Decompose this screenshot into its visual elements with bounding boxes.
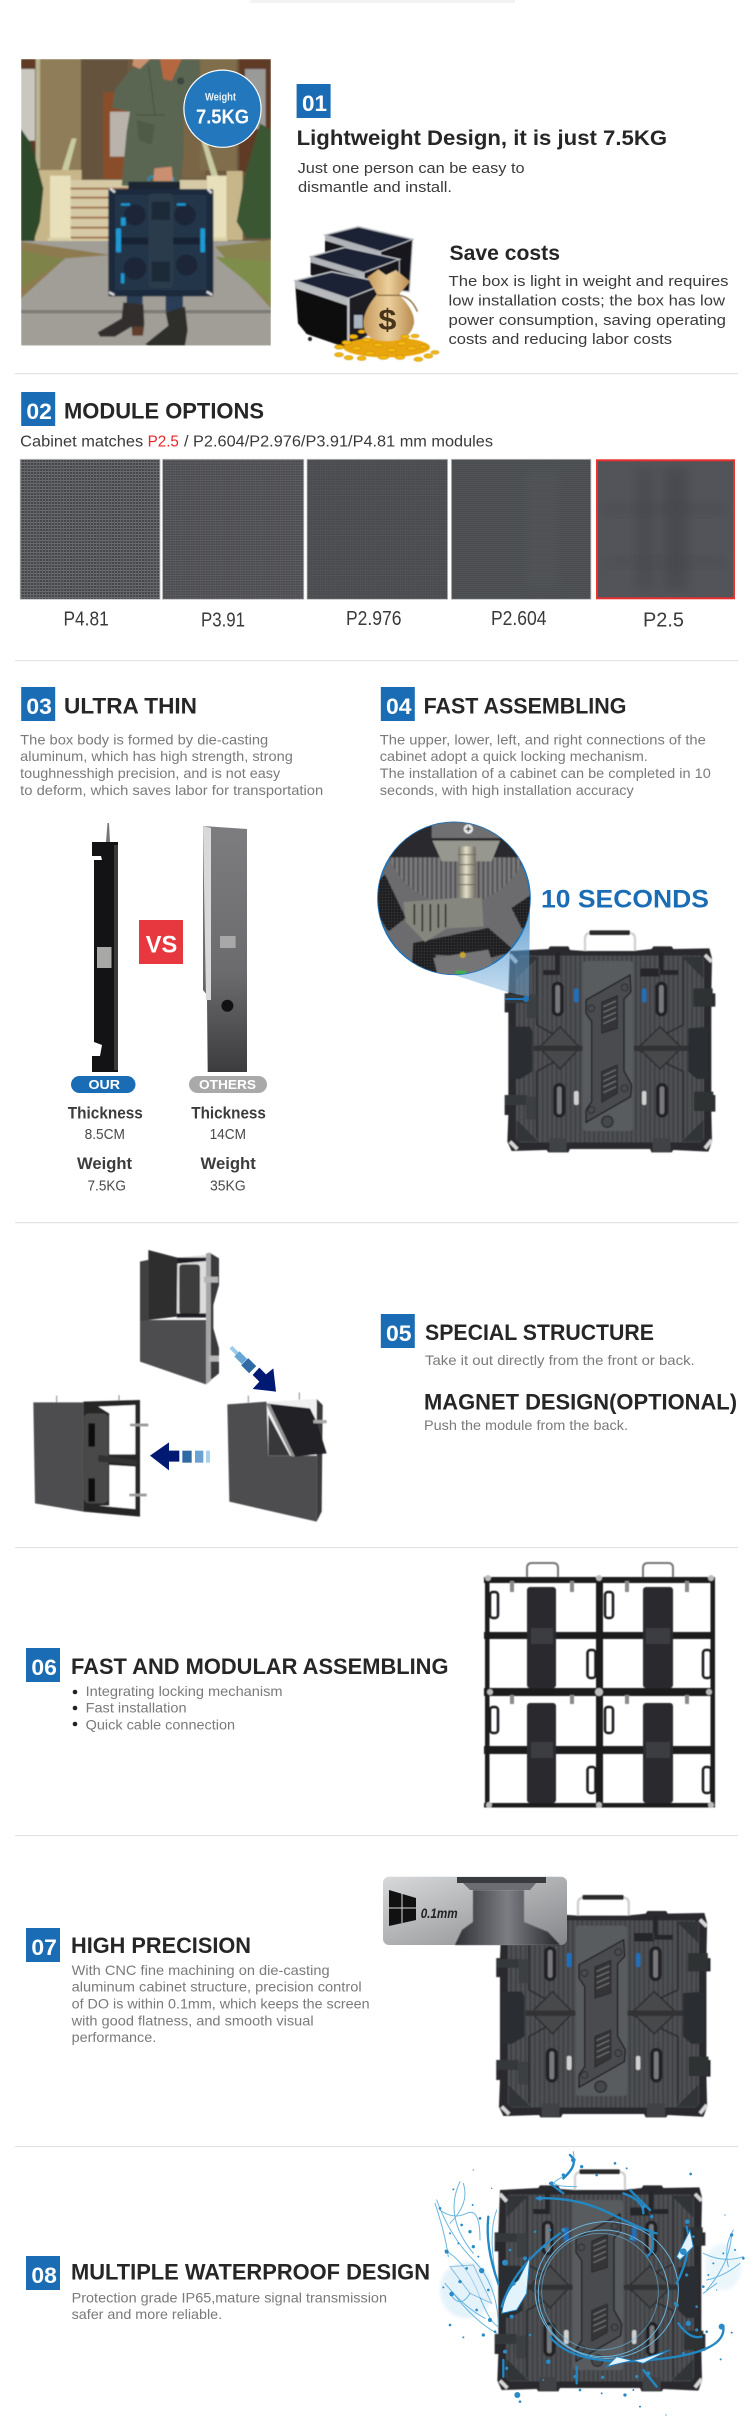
icon: flight cases and money bag: $ <box>378 304 396 337</box>
text: ultra thin description: aluminum, which has high strength, strong <box>20 748 293 764</box>
text: ultra thin description: toughnesshigh precision, and is not easy <box>20 765 280 781</box>
label: OTHERS: OTHERS <box>199 1077 256 1092</box>
text: waterproof description <box>72 2289 387 2322</box>
module swatch P4.81 <box>20 459 160 631</box>
module swatch P2.5 selected: P2.5 <box>643 610 684 632</box>
number badge 04 <box>381 687 415 721</box>
label: OTHERS <box>189 1076 267 1093</box>
text: fast assembling description: The installation of a cabinet can be completed in 10 <box>380 765 711 781</box>
section 03: ultra thin <box>20 687 323 1195</box>
text: one person install <box>298 160 525 196</box>
callout: blue funnel to lock <box>448 900 530 1002</box>
heading: save costs: Save costs <box>450 242 560 265</box>
text: cabinet matches modules: / P2.604/P2.976/P3.91/P4.81 mm modules <box>184 434 493 451</box>
badge: weight 7.5KG: 7.5KG <box>196 106 249 128</box>
icon: VS: VS <box>146 931 177 958</box>
section 02: module options <box>20 392 734 632</box>
image: module removal sequence <box>33 1250 327 1522</box>
spec: other thickness and weight: Thickness <box>191 1104 266 1122</box>
heading: magnet design: MAGNET DESIGN(OPTIONAL) <box>424 1389 737 1414</box>
text: high precision description: of DO is within 0.1mm, which keeps the screen <box>72 1995 370 2011</box>
image: CNC machining inset: 0.1mm <box>421 1905 458 1921</box>
heading: multiple waterproof design: MULTIPLE WATERPROOF DESIGN <box>71 2259 430 2284</box>
heading: special structure: SPECIAL STRUCTURE <box>425 1320 654 1345</box>
section 01: lightweight design <box>21 59 729 361</box>
number badge 08: 08 <box>31 2263 57 2288</box>
number badge 01 <box>297 84 331 118</box>
number badge 07 <box>26 1928 60 1962</box>
module swatch P4.81: P4.81 <box>64 609 109 631</box>
module swatch P2.976: P2.976 <box>346 608 402 630</box>
image: cabinet back <box>495 2169 705 2391</box>
spec: other thickness and weight: Weight <box>200 1155 256 1173</box>
spec: our thickness and weight: Weight <box>77 1155 132 1173</box>
list: assembling features <box>73 1683 283 1733</box>
text: take it out: Take it out directly from the front or back. <box>425 1352 695 1368</box>
cabinet with module folded out <box>227 1392 327 1522</box>
arrow: down-right <box>229 1346 276 1392</box>
image: four cabinet frame <box>484 1563 715 1808</box>
icon: flight cases and money bag <box>295 227 439 361</box>
text: high precision description: aluminum cabinet structure, precision control <box>72 1979 362 1995</box>
section 04: fast assembling <box>375 687 715 1152</box>
spec: other thickness and weight: 14CM <box>210 1127 246 1143</box>
image: magnified lock detail <box>377 822 531 976</box>
spec: other thickness and weight: 35KG <box>210 1179 246 1195</box>
section 06: fast and modular assembling <box>26 1563 715 1808</box>
section 05: special structure <box>33 1250 737 1522</box>
text: cabinet matches modules <box>20 434 493 451</box>
number badge 07: 07 <box>31 1935 57 1960</box>
heading: fast assembling: FAST ASSEMBLING <box>424 693 626 718</box>
text: push the module: Push the module from the back. <box>424 1417 628 1433</box>
image: other cabinet side view <box>203 826 247 1072</box>
text: 10 seconds: 10 SECONDS <box>541 885 709 913</box>
text: one person install: dismantle and install. <box>298 179 452 196</box>
heading: high precision: HIGH PRECISION <box>71 1933 251 1958</box>
section 08: multiple waterproof design <box>26 2152 745 2416</box>
text: high precision description: with good flatness, and smooth visual <box>71 2013 314 2029</box>
text: fast assembling description: The upper, lower, left, and right connections of the <box>380 731 706 747</box>
text: ultra thin description <box>20 731 323 798</box>
text: ultra thin description: to deform, which saves labor for transportation <box>20 782 323 798</box>
text: fast assembling description: seconds, with high installation accuracy <box>380 782 634 798</box>
number badge 06 <box>26 1648 60 1682</box>
spec: other thickness and weight <box>191 1104 266 1195</box>
text: save costs description <box>448 273 728 348</box>
badge: weight 7.5KG <box>184 70 261 147</box>
text: high precision description: With CNC fine machining on die-casting <box>72 1962 330 1978</box>
number badge 02 <box>21 392 55 426</box>
number badge 06: 06 <box>31 1655 57 1680</box>
text: save costs description: The box is light in weight and requires <box>448 273 728 290</box>
number badge 02: 02 <box>26 399 52 424</box>
number badge 01: 01 <box>302 91 327 116</box>
number badge 05 <box>381 1314 415 1348</box>
spec: our thickness and weight: Thickness <box>68 1104 143 1122</box>
image: CNC machining inset <box>383 1877 567 1945</box>
text: high precision description <box>71 1962 370 2045</box>
image: our slim cabinet side view <box>92 823 118 1072</box>
module swatch P2.976 <box>307 459 448 630</box>
text: fast assembling description <box>380 731 711 798</box>
label: OUR: OUR <box>88 1077 121 1092</box>
spec: our thickness and weight <box>68 1104 143 1195</box>
section 07: high precision <box>26 1877 710 2117</box>
number badge 03 <box>21 687 55 721</box>
cabinet with module removed <box>33 1395 148 1517</box>
text: waterproof description: safer and more reliable. <box>72 2306 222 2322</box>
image: water splash <box>435 2152 745 2416</box>
badge: weight 7.5KG: Weight <box>205 92 236 104</box>
module swatch P2.604: P2.604 <box>491 608 546 630</box>
image: cabinet back <box>505 930 715 1152</box>
number badge 03: 03 <box>26 694 52 719</box>
image: cabinet back <box>496 1895 710 2117</box>
number badge 04: 04 <box>386 694 412 719</box>
number badge 05: 05 <box>386 1321 412 1346</box>
spec: our thickness and weight: 8.5CM <box>85 1127 125 1143</box>
text: high precision description: performance. <box>72 2029 156 2045</box>
text: fast assembling description: cabinet adopt a quick locking mechanism. <box>380 748 648 764</box>
icon: VS <box>139 920 183 964</box>
text: save costs description: low installation costs; the box has low <box>448 292 725 309</box>
text: one person install: Just one person can be easy to <box>298 160 525 177</box>
list: assembling features: Integrating locking mechanism <box>86 1683 283 1699</box>
heading: ultra thin: ULTRA THIN <box>64 693 197 718</box>
text: save costs description: costs and reducing labor costs <box>448 331 672 348</box>
photo: person carrying cabinet <box>21 59 271 346</box>
heading: fast and modular assembling: FAST AND MODULAR ASSEMBLING <box>71 1654 448 1679</box>
text: cabinet matches modules: P2.5 <box>148 434 179 451</box>
list: assembling features: Quick cable connection <box>86 1717 235 1733</box>
arrow: left <box>150 1442 210 1470</box>
number badge 08 <box>26 2256 60 2290</box>
cabinet with module being pulled out <box>140 1250 219 1384</box>
heading: module options: MODULE OPTIONS <box>64 398 264 423</box>
text: save costs description: power consumption, saving operating <box>448 312 726 329</box>
module swatch P3.91 <box>162 459 304 632</box>
heading: lightweight design: Lightweight Design, it is just 7.5KG <box>297 126 667 150</box>
module swatch P2.604 <box>451 459 591 630</box>
module swatch P2.5 selected <box>597 460 734 632</box>
text: cabinet matches modules: Cabinet matches <box>20 434 143 451</box>
faint cropped text at top <box>250 0 515 3</box>
text: ultra thin description: The box body is formed by die-casting <box>20 731 268 747</box>
module swatch P3.91: P3.91 <box>201 610 245 632</box>
text: waterproof description: Protection grade IP65,mature signal transmission <box>72 2289 387 2305</box>
label: OUR <box>71 1076 136 1093</box>
list: assembling features: Fast installation <box>86 1700 187 1716</box>
spec: our thickness and weight: 7.5KG <box>88 1179 126 1195</box>
